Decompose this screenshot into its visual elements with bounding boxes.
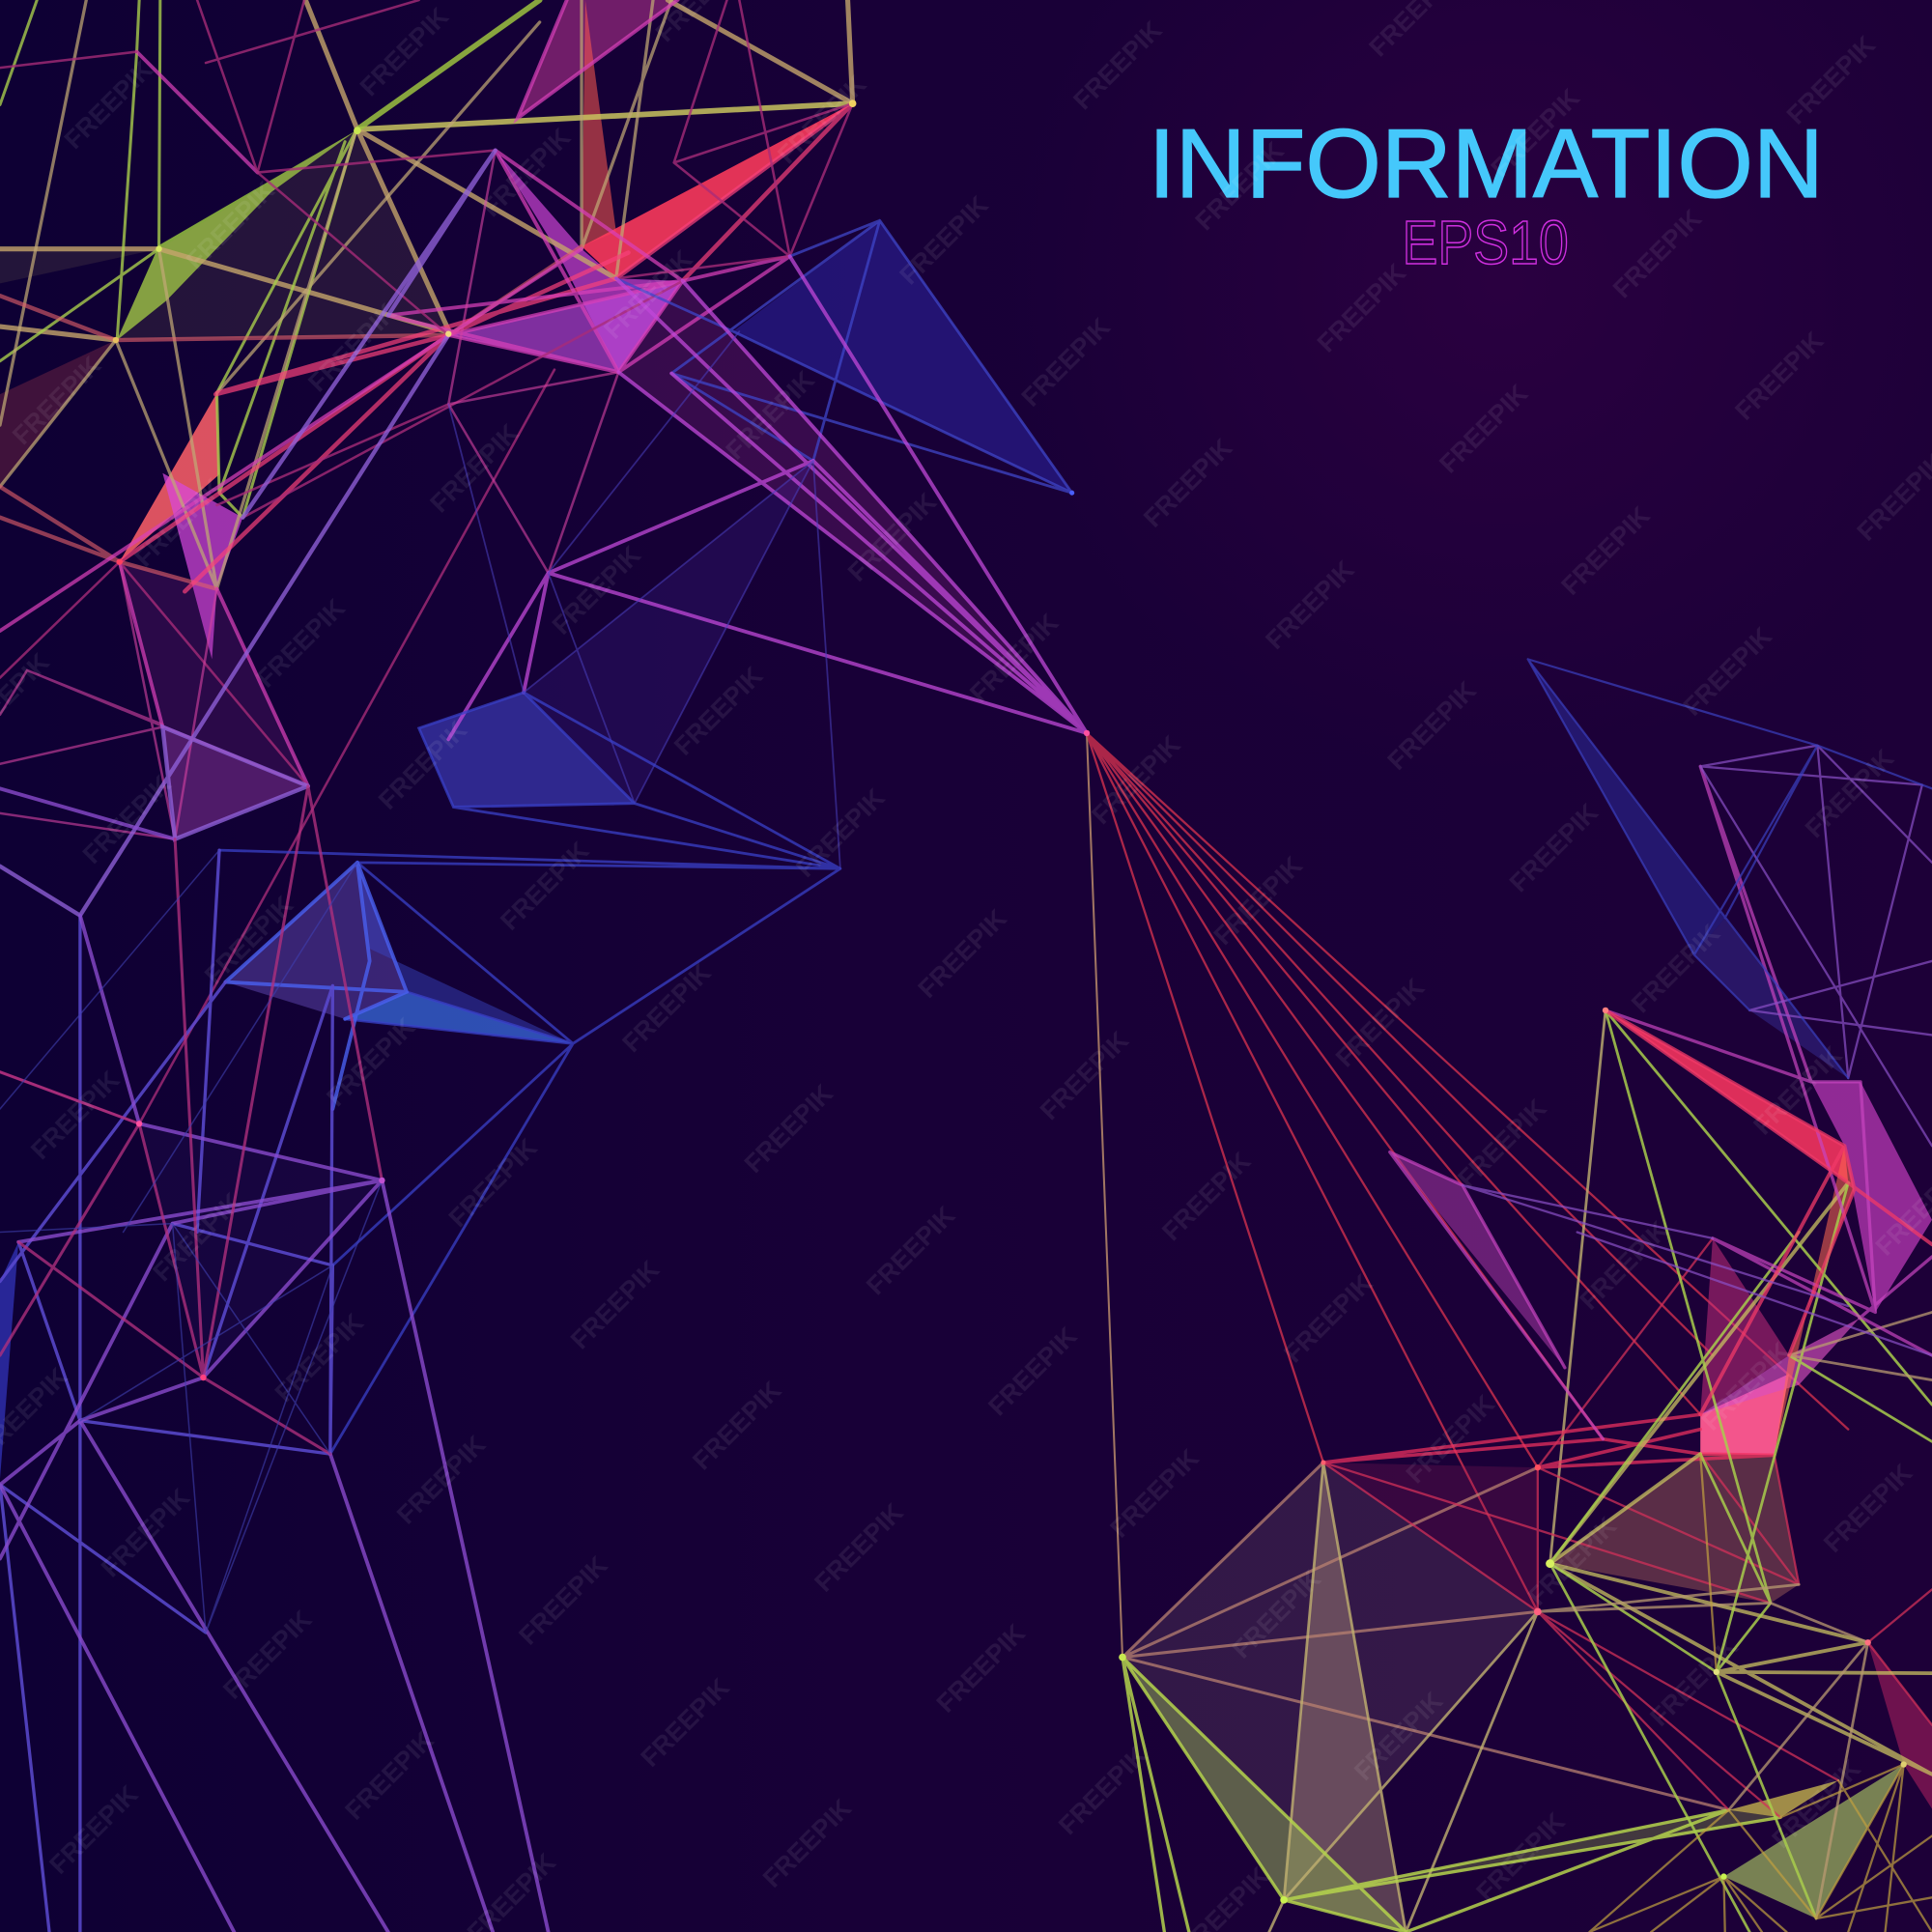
watermarks: FREEPIK: [739, 1078, 838, 1179]
watermarks: FREEPIK: [894, 190, 994, 290]
watermarks: FREEPIK: [1781, 30, 1882, 130]
mesh: top-left lines: [0, 0, 1087, 1123]
watermarks: FREEPIK: [1208, 850, 1308, 951]
watermarks: FREEPIK: [842, 487, 943, 587]
watermarks: FREEPIK: [1729, 326, 1830, 426]
watermarks: FREEPIK: [861, 1201, 961, 1300]
watermarks: FREEPIK: [1452, 1094, 1552, 1193]
watermarks: FREEPIK: [1260, 554, 1360, 655]
watermarks: FREEPIK: [339, 1725, 440, 1826]
watermarks: FREEPIK: [1607, 204, 1708, 303]
watermarks: FREEPIK: [1696, 1336, 1797, 1436]
watermarks: FREEPIK: [181, 175, 281, 275]
watermarks: FREEPIK: [598, 244, 698, 344]
watermarks: FREEPIK: [7, 350, 107, 450]
watermarks: FREEPIK: [913, 903, 1012, 1004]
watermarks: FREEPIK: [668, 661, 769, 761]
watermarks: FREEPIK: [217, 1605, 318, 1705]
watermarks: FREEPIK: [302, 298, 403, 397]
watermarks: FREEPIK: [495, 836, 595, 936]
watermarks: FREEPIK: [757, 1793, 858, 1893]
watermarks: FREEPIK: [251, 593, 351, 693]
watermarks: FREEPIK: [1067, 15, 1168, 115]
mesh: left-side blue and purple lines: [0, 693, 840, 1932]
watermarks: FREEPIK: [1555, 500, 1656, 601]
watermarks: FREEPIK: [25, 1065, 126, 1165]
watermarks: FREEPIK: [1349, 1686, 1449, 1786]
watermarks: FREEPIK: [513, 1550, 613, 1651]
watermarks: FREEPIK: [1644, 1632, 1745, 1732]
mesh: bottom-right filled facets: [1122, 659, 1932, 1932]
watermarks: FREEPIK: [147, 1187, 247, 1287]
watermarks: FREEPIK: [391, 1430, 492, 1530]
title: INFORMATION: [1149, 110, 1824, 218]
watermarks: FREEPIK: [43, 1779, 144, 1880]
watermarks: FREEPIK: [790, 782, 891, 883]
watermarks: FREEPIK: [1035, 1025, 1135, 1125]
watermarks: FREEPIK: [772, 70, 872, 169]
watermarks: FREEPIK: [424, 418, 525, 518]
mesh: top-left filled facets: [0, 0, 1087, 1479]
watermarks: FREEPIK: [1678, 621, 1777, 722]
watermarks: FREEPIK: [1575, 1215, 1674, 1316]
watermarks: FREEPIK: [321, 1011, 421, 1112]
watermarks: FREEPIK: [636, 1672, 735, 1773]
watermarks: FREEPIK: [1504, 797, 1605, 897]
watermarks: FREEPIK: [270, 1308, 369, 1407]
watermarks: FREEPIK: [1766, 1753, 1866, 1854]
watermarks: FREEPIK: [1105, 1443, 1205, 1544]
watermarks: FREEPIK: [1800, 743, 1900, 843]
watermarks: FREEPIK: [1278, 1268, 1378, 1368]
mesh: long lines from the central hub: [1087, 733, 1848, 1658]
watermarks: FREEPIK: [373, 715, 473, 815]
watermarks: FREEPIK: [721, 365, 820, 465]
watermarks: FREEPIK: [1312, 258, 1412, 358]
watermarks: FREEPIK: [1626, 918, 1726, 1018]
watermarks: FREEPIK: [1382, 675, 1482, 776]
watermarks: FREEPIK: [1138, 433, 1238, 533]
watermarks: FREEPIK: [565, 1255, 666, 1354]
watermarks: FREEPIK: [1156, 1146, 1257, 1246]
watermarks: FREEPIK: [1470, 1806, 1571, 1907]
watermarks: FREEPIK: [982, 1321, 1083, 1421]
mesh: bottom-right lines: [1122, 659, 1932, 1932]
watermarks: FREEPIK: [1434, 379, 1534, 479]
watermarks: FREEPIK: [1522, 1511, 1623, 1611]
subtitle: EPS10: [1403, 208, 1569, 277]
watermarks: FREEPIK: [59, 54, 158, 155]
watermarks: FREEPIK: [1818, 1458, 1918, 1558]
watermarks: FREEPIK: [547, 540, 646, 640]
watermarks: FREEPIK: [96, 1483, 196, 1582]
watermarks: FREEPIK: [355, 1, 454, 101]
watermarks: FREEPIK: [1086, 729, 1186, 830]
watermarks: FREEPIK: [199, 890, 299, 990]
watermarks: FREEPIK: [1227, 1564, 1327, 1664]
watermarks: FREEPIK: [616, 957, 717, 1058]
watermarks: FREEPIK: [931, 1618, 1031, 1719]
watermarks: FREEPIK: [128, 472, 229, 572]
watermarks: FREEPIK: [1016, 312, 1116, 412]
watermarks: FREEPIK: [77, 769, 177, 869]
watermarks: FREEPIK: [964, 608, 1065, 708]
watermarks: FREEPIK: [1190, 136, 1290, 236]
watermarks: FREEPIK: [809, 1497, 909, 1598]
watermarks: FREEPIK: [687, 1376, 787, 1475]
watermarks: FREEPIK: [1053, 1740, 1153, 1840]
watermarks: FREEPIK: [1747, 1040, 1848, 1140]
watermarks: FREEPIK: [476, 122, 577, 222]
watermarks: FREEPIK: [1330, 973, 1431, 1072]
watermarks: FREEPIK: [1401, 1389, 1500, 1489]
watermarks: FREEPIK: [443, 1132, 543, 1233]
watermarks: FREEPIK: [1486, 83, 1585, 183]
